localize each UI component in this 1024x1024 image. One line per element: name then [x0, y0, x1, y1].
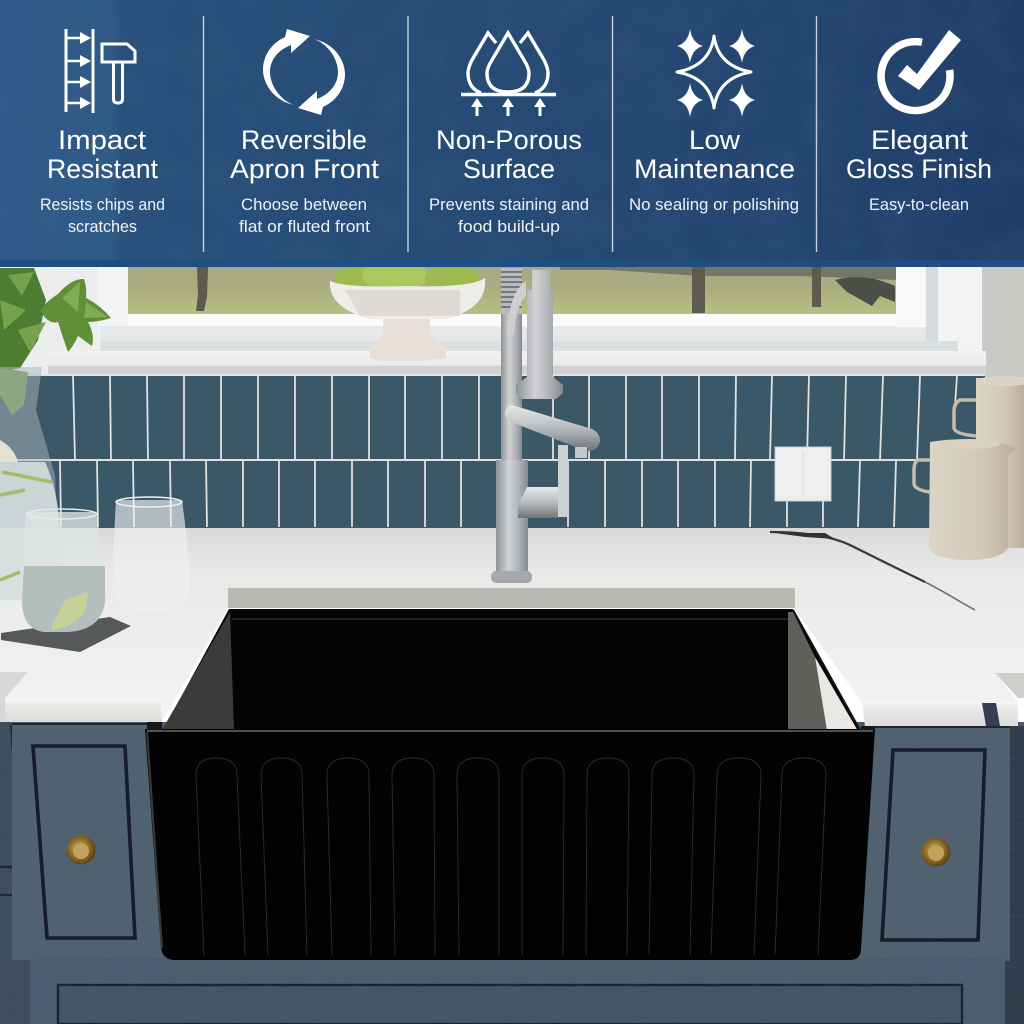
- feature: non-porous surface: [429, 33, 589, 236]
- icon: sparkles: [677, 29, 755, 117]
- feature: non-porous surface: Surface: [463, 154, 555, 184]
- window: [98, 267, 982, 351]
- cabinet: [0, 722, 1024, 1024]
- feature: low maintenance: Maintenance: [634, 154, 795, 184]
- marble veins: [770, 532, 925, 582]
- description: Choose between: [241, 196, 367, 214]
- icon: check mark in ring: [881, 30, 961, 111]
- cabinet right door panel: [882, 750, 985, 940]
- description: Resists chips and: [40, 196, 165, 214]
- feature: impact resistant: [40, 29, 165, 236]
- glass vase: [0, 367, 60, 600]
- feature: reversible apron front: [230, 29, 380, 236]
- backsplash tiles: [0, 374, 985, 528]
- icon: water drops on surface: [461, 33, 556, 116]
- heading: Elegant: [871, 125, 969, 155]
- blue feature banner: [0, 0, 1024, 267]
- feature: non-porous surface: food build-up: [458, 218, 560, 236]
- back jug: [954, 376, 1024, 548]
- description: Prevents staining and: [429, 196, 589, 214]
- empty drinking glass: [113, 497, 190, 613]
- heading: Non-Porous: [436, 125, 582, 155]
- sink rim ledge: [228, 588, 795, 608]
- cabinet left door panel: [33, 746, 135, 938]
- faucet spray holder: [516, 270, 563, 399]
- brass knob left: [66, 836, 96, 864]
- icon: reversible arrows: [263, 29, 345, 115]
- sink flutes: [196, 758, 826, 955]
- brass knob right: [922, 838, 950, 866]
- sink apron front: [145, 729, 875, 960]
- wall background: [0, 267, 1024, 387]
- heading: Reversible: [241, 125, 367, 155]
- feature: impact resistant: Resistant: [47, 154, 158, 184]
- faucet hose coil: [501, 268, 522, 314]
- feature: low maintenance: [629, 29, 799, 214]
- feature: impact resistant: scratches: [68, 218, 137, 236]
- bowl with apples: [330, 261, 485, 361]
- faucet spout: [505, 405, 600, 451]
- feature: elegant gloss finish: [846, 30, 992, 214]
- faucet: [491, 268, 600, 583]
- front jug: [914, 439, 1017, 560]
- sink inner basin: [162, 609, 860, 732]
- stone wall right: [980, 267, 1024, 377]
- faucet base: [496, 460, 528, 574]
- description: No sealing or polishing: [629, 196, 799, 214]
- dividers: [204, 16, 816, 252]
- plant: [0, 268, 111, 415]
- feature: reversible apron front: Apron Front: [230, 154, 380, 184]
- countertop: [0, 528, 1024, 726]
- feature: reversible apron front: flat or fluted front: [239, 218, 370, 236]
- feature: elegant gloss finish: Gloss Finish: [846, 154, 992, 184]
- faucet handle: [558, 445, 568, 517]
- heading: Impact: [58, 125, 147, 155]
- drinking glass with water: [22, 509, 106, 632]
- faucet main pipe: [501, 314, 522, 464]
- window sill: [48, 351, 986, 374]
- heading: Low: [689, 125, 741, 155]
- description: Easy-to-clean: [869, 196, 969, 214]
- icon: wall with arrows and hammer: [66, 29, 135, 113]
- black fluted farmhouse sink: [145, 609, 875, 960]
- napkin: [1, 617, 131, 652]
- wall switch plate: [775, 447, 831, 501]
